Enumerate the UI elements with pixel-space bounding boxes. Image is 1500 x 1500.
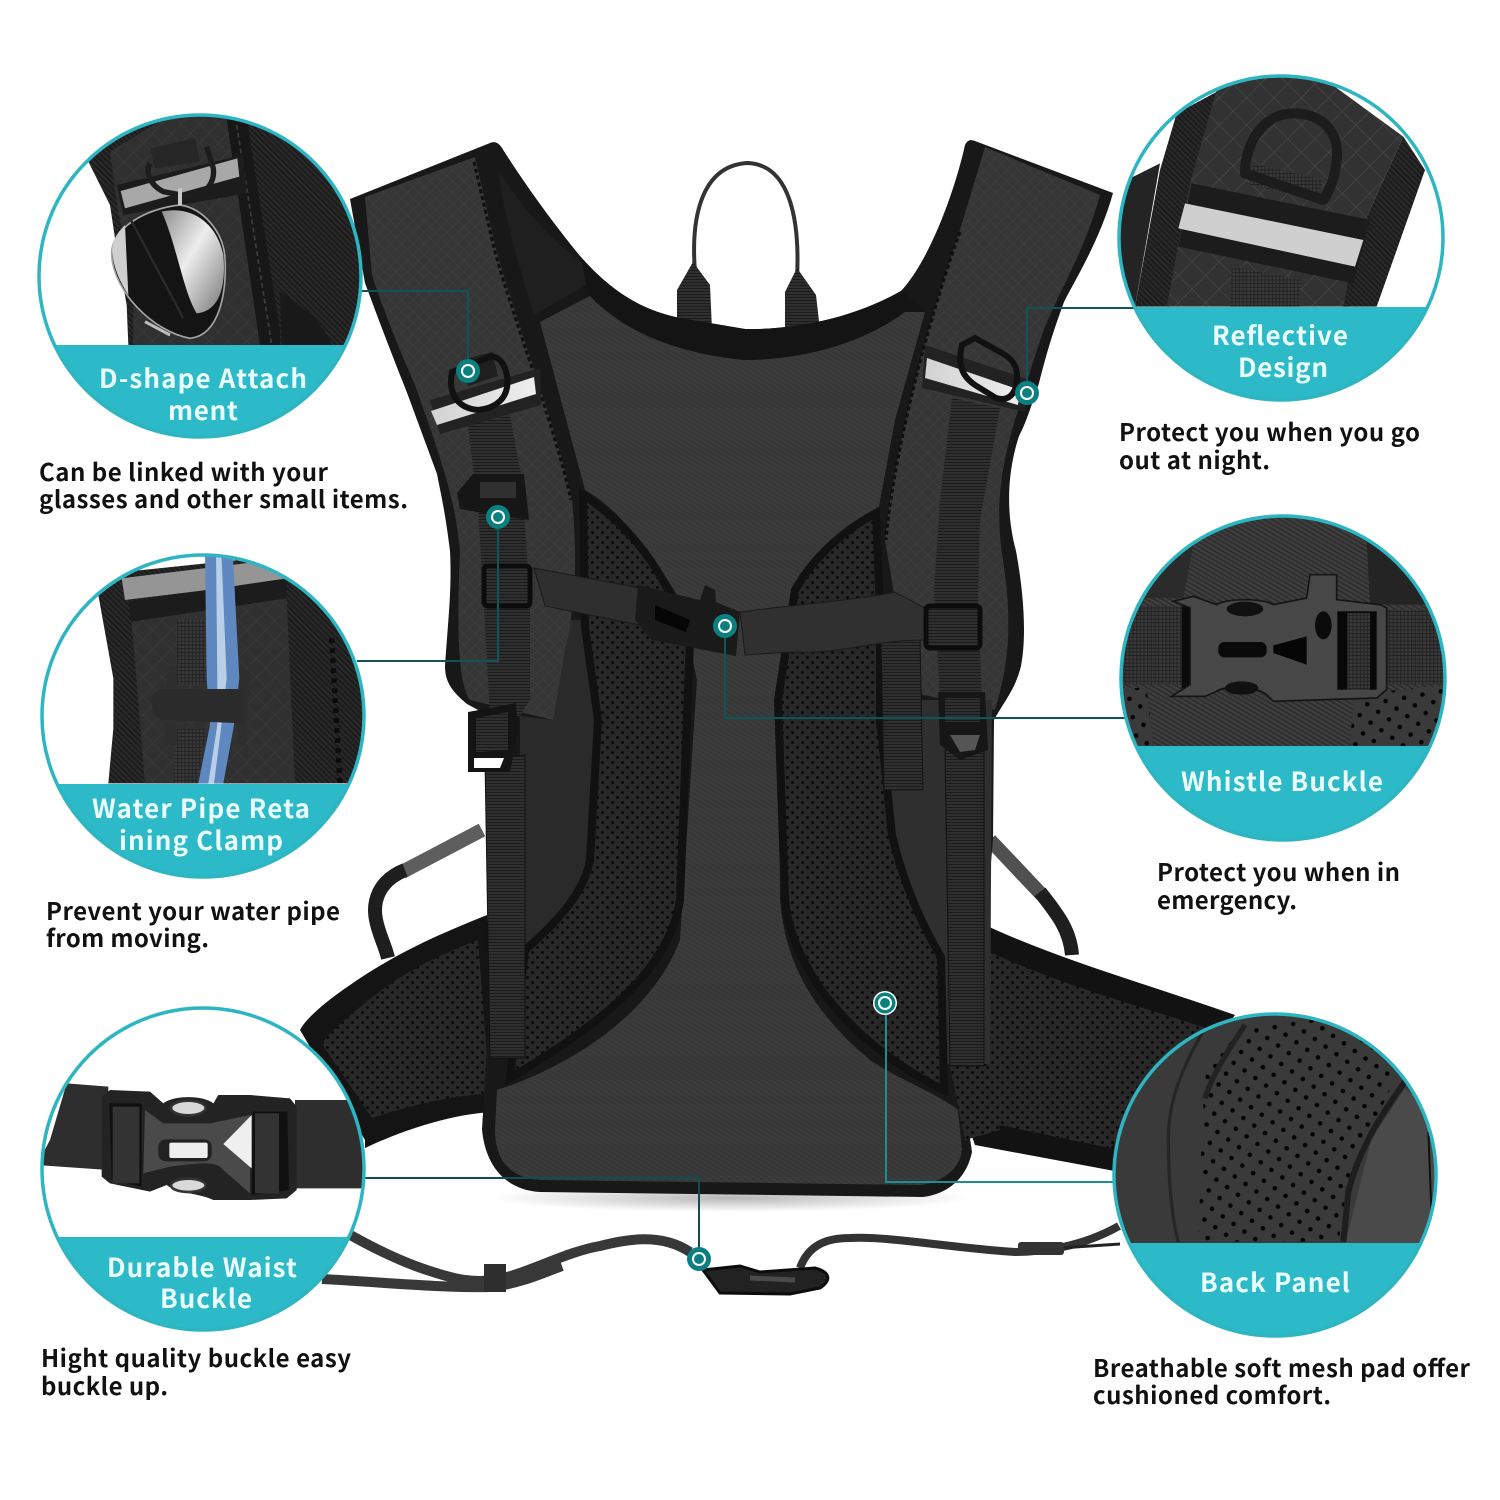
marker: back panel — [873, 991, 897, 1015]
description — [46, 892, 340, 954]
heading: Whistle Buckle — [1181, 762, 1383, 799]
right chest slider — [926, 606, 980, 648]
marker: waist buckle — [687, 1247, 711, 1271]
detail circle ring — [1119, 76, 1443, 400]
left chest slider — [484, 566, 530, 606]
leader line: clamp — [357, 528, 498, 661]
heading: Back Panel — [1200, 1263, 1350, 1300]
leader line: back panel — [886, 1014, 1113, 1182]
waist belt straps and buckle — [322, 1226, 1120, 1294]
whistle chest buckle — [635, 585, 740, 656]
description: glasses and other small items. — [39, 480, 408, 515]
right shoulder strap fabric — [885, 147, 1100, 710]
top handle loop — [677, 163, 820, 330]
chest strap right — [740, 592, 925, 655]
leader line: whistle buckle — [725, 637, 1125, 718]
right side smooth panel — [880, 700, 992, 1064]
heading: Water Pipe Reta — [92, 789, 310, 826]
short center webbing tail — [881, 640, 923, 790]
left grey loop strap — [375, 830, 482, 958]
left strap inner mesh — [498, 170, 586, 315]
description: Prevent your water pipe — [46, 892, 340, 927]
lower right mesh corner — [950, 1066, 1000, 1140]
heading: Reflective — [1212, 316, 1348, 353]
left lower webbing — [485, 755, 525, 1058]
callout: durable waist buckle — [30, 1008, 370, 1402]
right mesh pad — [778, 513, 944, 1090]
right strap webbing — [934, 398, 1000, 700]
leader line: d-shape — [362, 291, 468, 361]
description: Protect you when in — [1157, 853, 1400, 888]
neck band — [580, 256, 925, 360]
center back panel — [495, 296, 962, 1185]
left strap webbing — [468, 415, 530, 716]
ground shadow — [490, 1184, 970, 1212]
heading: Buckle — [160, 1279, 252, 1316]
heading — [92, 789, 310, 858]
heading — [1212, 316, 1348, 385]
left shoulder strap fabric — [365, 157, 575, 720]
detail circle: reflective band — [1120, 78, 1426, 398]
description: Breathable soft mesh pad offer — [1093, 1349, 1471, 1384]
description — [1093, 1349, 1471, 1411]
water pipe clamp — [457, 474, 529, 520]
heading: Durable Waist — [107, 1248, 297, 1285]
left d-ring — [451, 352, 507, 410]
heading: ment — [168, 391, 238, 428]
marker: clamp — [486, 505, 510, 529]
detail circle: glasses on d-ring — [56, 116, 360, 436]
marker: d-ring — [456, 359, 480, 383]
detail circle ring — [42, 555, 364, 877]
callout: D-shape attachment — [30, 112, 408, 515]
callout: back panel — [1093, 1005, 1471, 1411]
description: Can be linked with your — [39, 453, 329, 488]
description — [39, 453, 408, 515]
description: out at night. — [1119, 441, 1270, 476]
leader line: waist buckle — [365, 1178, 699, 1248]
callout: water pipe clamp — [30, 552, 373, 954]
description: cushioned comfort. — [1093, 1376, 1331, 1411]
backpack illustration — [300, 140, 1235, 1294]
heading — [107, 1248, 297, 1316]
right reflective band — [922, 345, 1030, 412]
detail circle: waist buckle — [44, 1056, 362, 1328]
description: from moving. — [46, 919, 209, 954]
leader line: reflective — [1027, 308, 1135, 383]
detail circle: water pipe clamp — [59, 556, 362, 876]
marker: reflective — [1015, 381, 1039, 405]
detail circle ring — [42, 1008, 364, 1330]
lower left slider — [468, 703, 518, 772]
description: buckle up. — [41, 1367, 168, 1402]
detail circle ring — [1121, 516, 1445, 840]
description: emergency. — [1157, 881, 1297, 916]
description: Hight quality buckle easy — [41, 1339, 351, 1374]
left mesh pad — [510, 495, 690, 1078]
right lower webbing — [945, 750, 984, 1066]
stitching on shoulder straps — [474, 162, 960, 540]
detail circle ring — [39, 115, 361, 437]
bag body silhouette — [350, 140, 1113, 1197]
detail circle ring — [1114, 1014, 1436, 1336]
detail circle: whistle buckle — [1122, 518, 1444, 838]
heading — [99, 359, 307, 428]
heading: D-shape Attach — [99, 359, 307, 396]
left side smooth panel — [520, 620, 605, 955]
detail circle: mesh back panel — [1116, 1016, 1434, 1334]
lower right slider — [938, 692, 988, 760]
description — [1157, 853, 1400, 916]
left reflective band — [430, 368, 541, 434]
heading: ining Clamp — [119, 821, 283, 858]
heading: Design — [1238, 348, 1328, 385]
description: Protect you when you go — [1119, 413, 1420, 448]
description — [41, 1339, 351, 1402]
description — [1119, 413, 1420, 476]
callout: reflective design — [1110, 73, 1450, 476]
right d-ring — [960, 338, 1017, 399]
right grey loop strap — [990, 840, 1072, 955]
callout: whistle buckle — [1110, 508, 1450, 916]
left waist wing — [300, 915, 497, 1148]
marker: whistle buckle — [713, 614, 737, 638]
right waist wing — [955, 925, 1235, 1172]
chest strap left — [534, 568, 640, 625]
